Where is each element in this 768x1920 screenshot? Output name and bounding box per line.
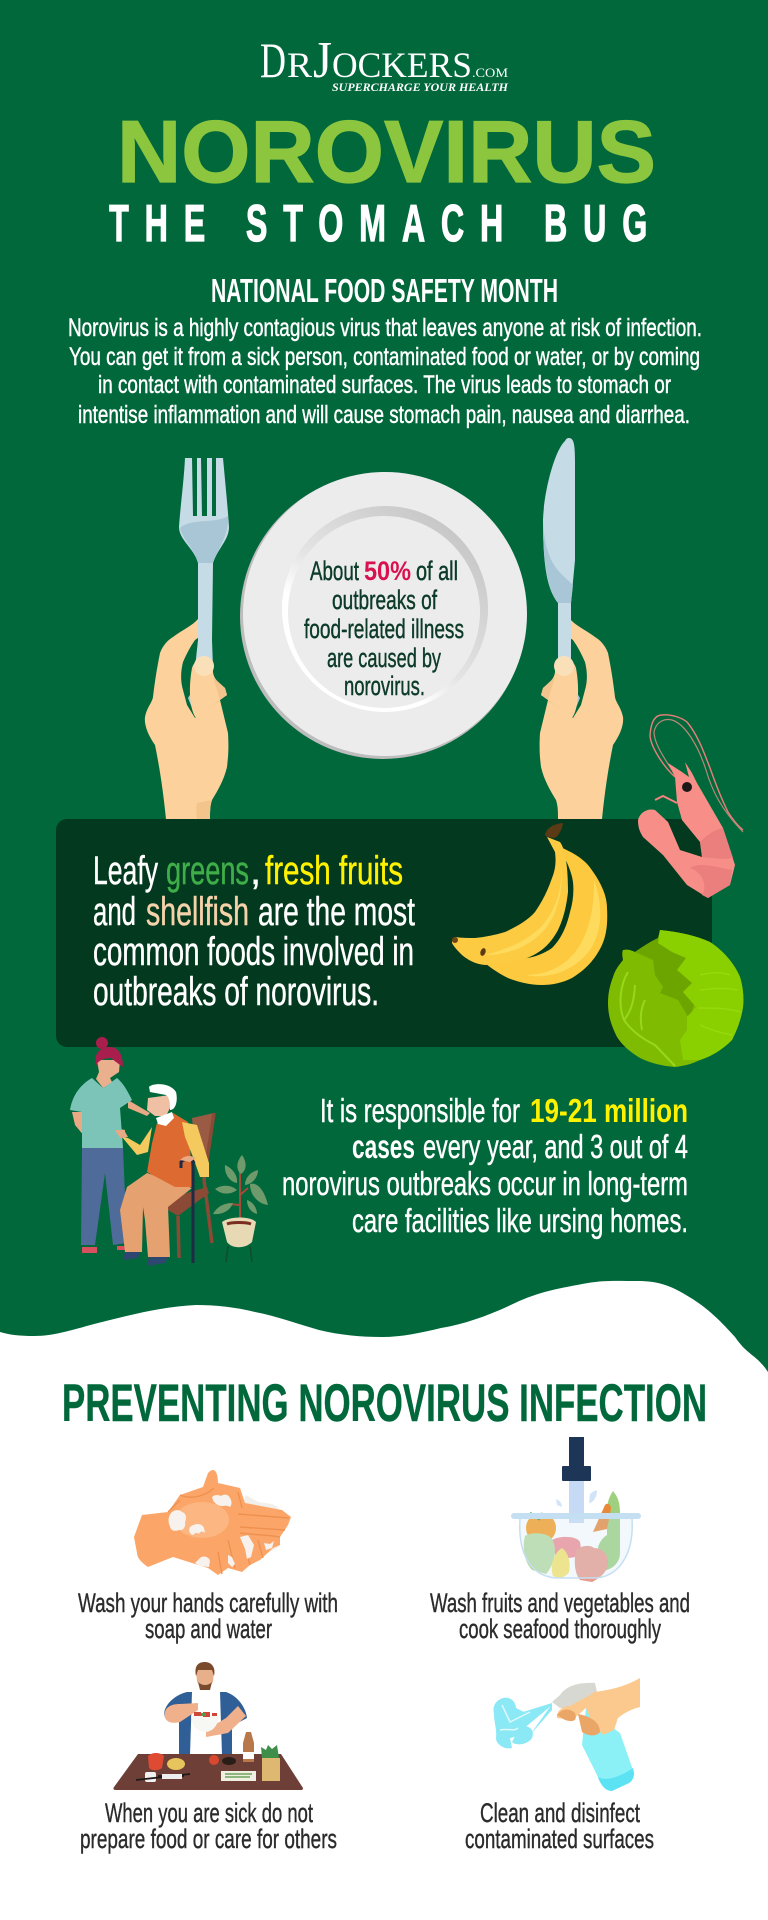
icon: spray bottle in hand [493, 1678, 640, 1791]
icon: person preparing food [113, 1662, 303, 1790]
icon: bowl of washed fruit [511, 1437, 641, 1582]
plate text: are caused by [327, 643, 441, 673]
cane [192, 1162, 194, 1263]
chair [192, 1113, 214, 1160]
text: cases statistic [282, 1092, 688, 1239]
title: NOROVIRUS [117, 102, 656, 201]
plant [228, 1165, 248, 1227]
logo: D [260, 32, 286, 88]
plate text: of all [416, 556, 458, 586]
icon: bananas [452, 823, 607, 985]
plate text: outbreaks of [332, 585, 437, 615]
caption: clean: Clean and disinfect [480, 1798, 640, 1828]
icon: shrimp [638, 715, 743, 898]
caption: wash hands [78, 1588, 338, 1644]
text: cases statistic: 19-21 million [530, 1092, 688, 1129]
plate text: About [310, 556, 359, 586]
logo [260, 32, 509, 94]
illustration: nurse and elderly man [70, 1037, 268, 1266]
logo: .COM [472, 65, 508, 80]
intro paragraph [68, 314, 702, 429]
panel text [93, 849, 415, 1014]
panel text: Leafy [93, 849, 158, 893]
caption: sick: When you are sick do not [105, 1798, 313, 1828]
caption: sick [80, 1798, 337, 1854]
plate text: norovirus. [344, 671, 425, 701]
caption: wash hands: soap and water [145, 1614, 272, 1644]
text: cases statistic: It is responsible for [320, 1092, 520, 1129]
man torso [147, 1113, 193, 1187]
plate text: food-related illness [304, 614, 464, 644]
plate text [304, 556, 464, 701]
panel text: and [93, 890, 136, 934]
panel text: are the most [258, 890, 415, 934]
logo: OCKERS [332, 45, 472, 85]
icon: right hand with knife [540, 438, 623, 819]
panel text: shellfish [146, 890, 249, 934]
panel text: , [250, 849, 261, 893]
logo: J [313, 32, 332, 89]
caption: sick: prepare food or care for others [80, 1824, 337, 1854]
icon: washing hands [134, 1470, 291, 1575]
man head [147, 1095, 170, 1116]
caption: clean [465, 1798, 654, 1854]
text: cases statistic: cases [352, 1128, 415, 1165]
caption: wash hands: Wash your hands carefully with [78, 1588, 338, 1618]
man pants and legs [120, 1173, 192, 1257]
icon: left hand with fork [145, 458, 229, 819]
logo: SUPERCHARGE YOUR HEALTH [332, 80, 509, 94]
caption: clean: contaminated surfaces [465, 1824, 654, 1854]
subtitle: THE STOMACH BUG [109, 195, 647, 253]
nurse [81, 1148, 127, 1245]
caption: wash fruits [430, 1588, 690, 1644]
green background [0, 0, 768, 1372]
plate with statistic [240, 472, 527, 759]
panel: common foods [56, 819, 712, 1047]
panel text: outbreaks of norovirus. [93, 970, 379, 1014]
panel text: common foods involved in [93, 930, 414, 974]
logo: R [287, 45, 312, 85]
icon: cabbage [608, 930, 743, 1067]
panel text: fresh fruits [265, 849, 403, 893]
heading: national food safety month: NATIONAL FOOD SAFETY MONTH [211, 272, 558, 309]
plate text: 50% [364, 556, 411, 586]
panel text: greens [166, 849, 249, 893]
caption: wash fruits: cook seafood thoroughly [459, 1614, 661, 1644]
